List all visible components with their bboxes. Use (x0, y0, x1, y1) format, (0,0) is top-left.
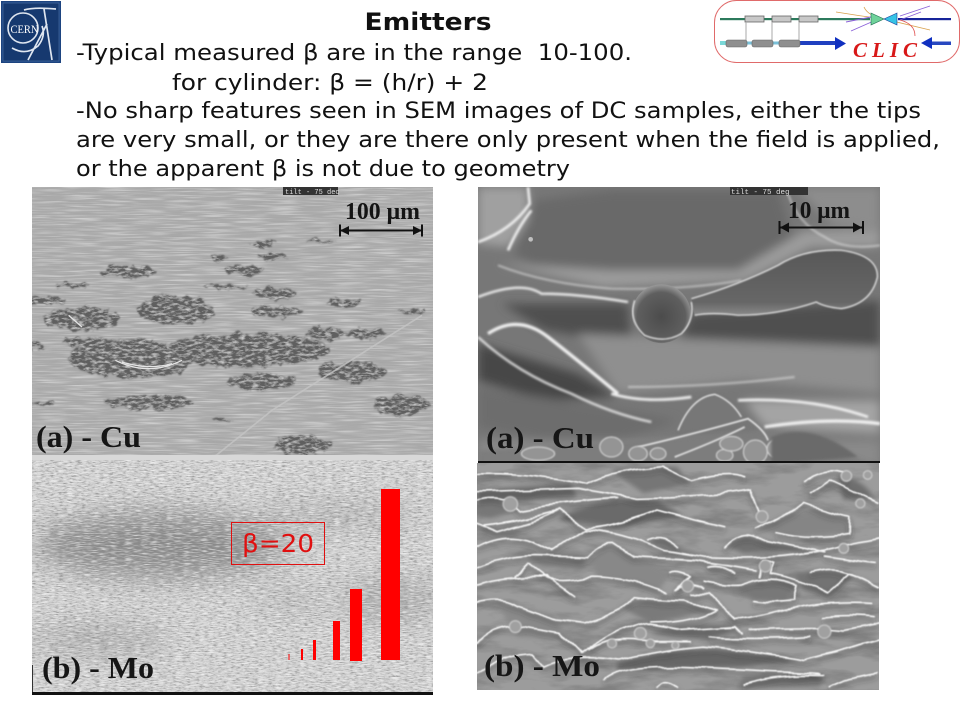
text block: emitter notes: -Typical measured β are in the range 10-100. (76, 41, 632, 66)
icon: CERN logo: CERN (10, 22, 39, 36)
label: (a) - Cu: (a) - Cu (36, 419, 141, 454)
panel: (b) Mo high magnification SEM image (477, 463, 879, 690)
icon: CLIC logo: CLIC (853, 38, 918, 62)
mound and nodules (481, 392, 860, 461)
text block: emitter notes: -No sharp features seen in SEM images of DC samples, either the tips (76, 99, 921, 124)
callout: beta=20 (232, 522, 324, 564)
droplet: round ball (632, 284, 691, 343)
label: tilt (730, 187, 808, 196)
bright ridges (478, 187, 880, 427)
text block: emitter notes: or the apparent β is not due to geometry (76, 157, 570, 182)
scale bar: 100 µm (340, 199, 422, 236)
panel: (a) Cu 10 µm SEM image (478, 187, 880, 467)
droplet: lower ball edge (633, 300, 692, 339)
title: Emitters (364, 8, 492, 36)
droplet: elongated bulb (691, 250, 877, 315)
scale bar: 10 µm: 10 μm (788, 198, 850, 224)
label: tilt (283, 187, 339, 195)
panel: (a) Cu 100 µm SEM image (27, 187, 433, 460)
icon: CERN logo (1, 1, 61, 63)
label: (b) - Mo: (b) - Mo (42, 650, 154, 685)
bar chart: red emitter height bars (288, 489, 400, 661)
text block: emitter notes (76, 41, 940, 182)
label: tilt: tilt - 75 deg (731, 189, 790, 197)
callout: beta=20: β=20 (242, 529, 314, 558)
text block: emitter notes: for cylinder: β = (h/r) + 2 (172, 71, 488, 96)
scale bar: 100 µm: 100 μm (345, 199, 420, 225)
metal mounds (477, 467, 874, 688)
bright ridge lines (477, 467, 879, 687)
scale bar: 10 µm (779, 198, 863, 234)
label: tilt: tilt - 75 dec (285, 189, 340, 197)
label: (b) - Mo: (b) - Mo (484, 648, 600, 683)
icon: CLIC logo (714, 0, 960, 62)
label: (a) - Cu: (a) - Cu (486, 420, 594, 455)
panel: (b) Mo low magnification SEM image (30, 460, 440, 692)
shaded metal sheets (478, 187, 880, 467)
text block: emitter notes: are very small, or they are there only present when the field is applied, (76, 128, 940, 153)
